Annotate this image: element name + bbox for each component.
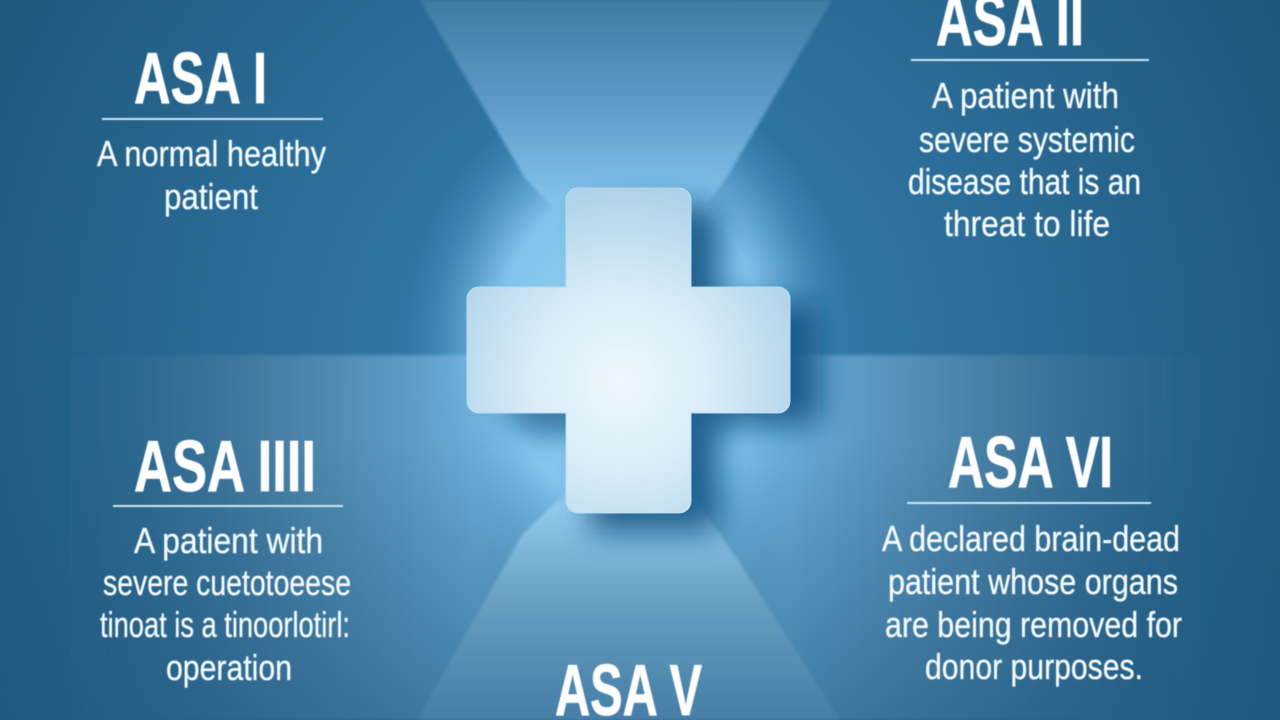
divider: ASA I [102, 118, 323, 120]
text: ASA I description: A normal healthy [97, 133, 326, 174]
heading: ASA I: ASA I [134, 39, 267, 119]
heading: ASA VI: ASA VI [948, 423, 1113, 503]
text: ASA III description: A patient with [134, 520, 323, 561]
text: ASA II description: severe systemic [919, 119, 1135, 160]
text: ASA III description: severe cuetotoeese [103, 562, 351, 603]
heading: ASA III: ASA IIII [134, 427, 316, 507]
text: ASA III description: operation [166, 647, 292, 688]
panel: ASA I [97, 39, 326, 217]
text: ASA VI description: patient whose organs [888, 561, 1178, 602]
text: ASA VI description: A declared brain-dead [882, 518, 1180, 559]
divider: ASA III [113, 505, 343, 507]
text: ASA I description [97, 133, 326, 217]
panel: ASA VI [882, 423, 1182, 687]
text: ASA II description [908, 75, 1141, 244]
text: ASA VI description [882, 518, 1182, 687]
panel: ASA II [908, 0, 1149, 244]
text: ASA I description: patient [164, 176, 258, 217]
text: ASA II description: threat to life [944, 203, 1110, 244]
icon: medical cross [467, 188, 820, 532]
divider: ASA II [911, 59, 1149, 61]
text: ASA II description: disease that is an [908, 161, 1141, 202]
text: ASA III description [100, 520, 351, 688]
text: ASA VI description: donor purposes. [925, 646, 1143, 687]
text: ASA III description: tinoat is a tinoorlotirl: [100, 604, 350, 645]
panel: ASA III [100, 427, 351, 688]
text: ASA II description: A patient with [932, 75, 1119, 116]
text: ASA VI description: are being removed for [885, 604, 1182, 645]
divider: ASA VI [907, 502, 1151, 504]
